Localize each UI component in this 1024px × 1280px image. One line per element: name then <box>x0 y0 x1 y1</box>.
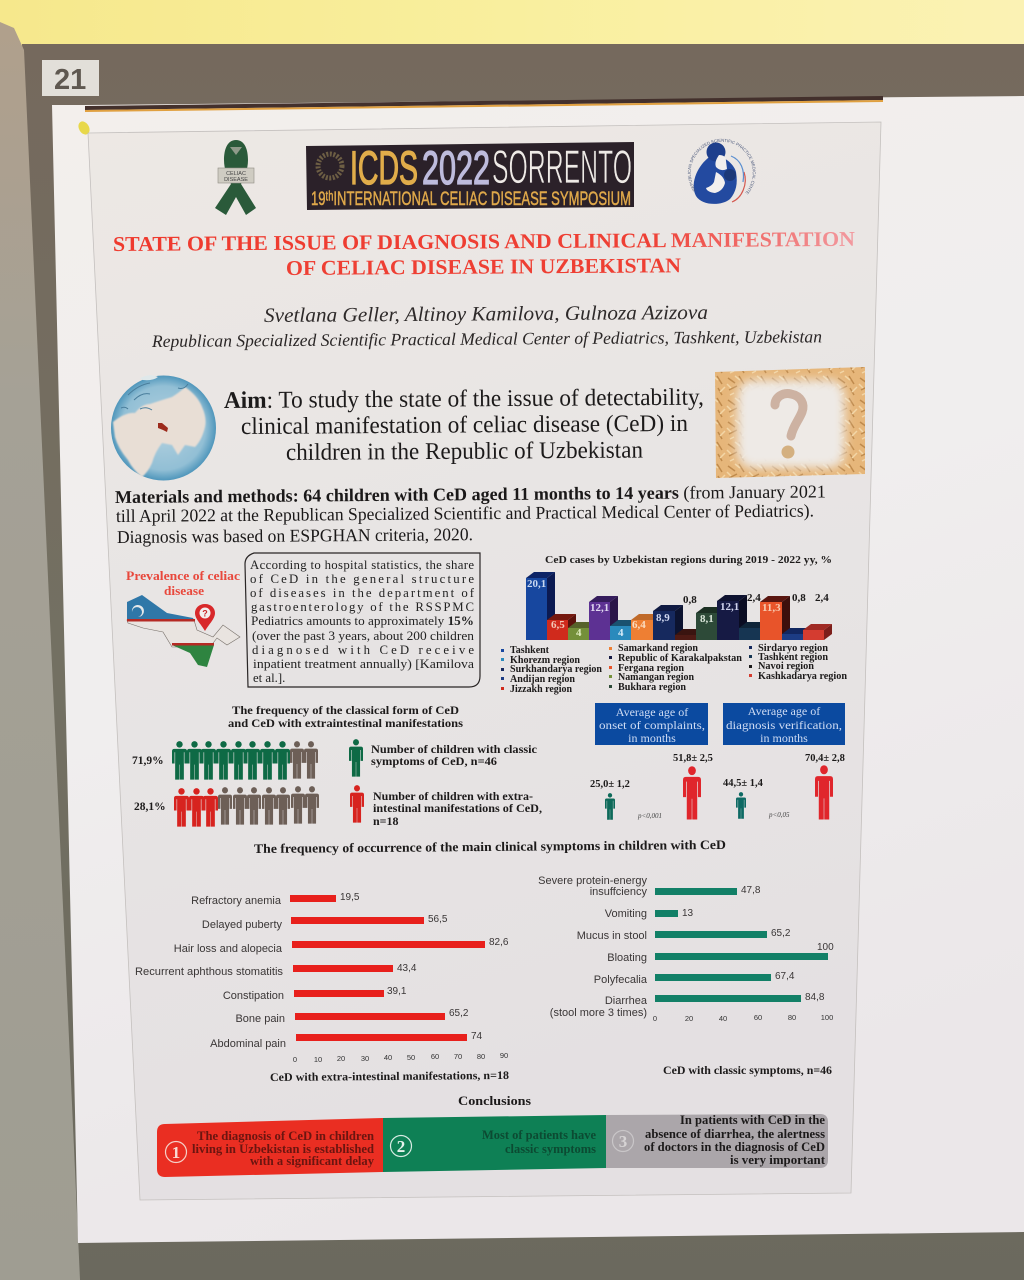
icon: celiac ribbon: DISEASE <box>224 177 248 183</box>
aim: clinical manifestation of celiac disease (CeD) in <box>241 411 688 440</box>
legend: extraintestinal: intestinal manifestations of CeD, <box>373 801 542 815</box>
bar chart: extra-intestinal manifestations: Refractory anemia <box>191 895 282 907</box>
bar value labels: 12,1 <box>590 602 609 614</box>
chart legend: regions: Surkhandarya region <box>510 664 602 675</box>
bar chart: classic symptoms: 100 <box>821 1013 833 1022</box>
pictogram: classic symptoms 71,9% <box>132 741 318 780</box>
legend: extraintestinal: Number of children with extra- <box>373 789 533 803</box>
heading: classical form frequency: The frequency of the classical form of CeD <box>232 705 459 717</box>
callout: hospital statistics: (over the past 3 years, about 200 children <box>252 629 475 643</box>
callout: hospital statistics: gastroenterology of the RSSPMC <box>251 600 474 614</box>
ICDS banner: ICDS <box>350 141 418 194</box>
bar value labels: 6,5 <box>551 619 565 631</box>
figures: verification age <box>723 753 845 819</box>
bar value labels: 4 <box>618 627 624 639</box>
bar chart: extra-intestinal manifestations: 20 <box>337 1054 345 1063</box>
poster number tag: 21 <box>54 64 86 96</box>
bar value labels: 11,3 <box>762 602 781 614</box>
chart legend: regions: Tashkent region <box>758 652 828 663</box>
materials and methods <box>115 481 826 547</box>
figures: onset age <box>590 753 713 820</box>
bar chart: extra-intestinal manifestations: Hair loss and alopecia <box>174 943 283 955</box>
conclusion 1 <box>157 1118 383 1177</box>
icon: celiac ribbon <box>215 140 256 215</box>
bar chart: classic symptoms: Vomiting <box>605 908 647 920</box>
bar chart: extra-intestinal manifestations: 39,1 <box>387 986 407 997</box>
left side panel <box>0 22 80 1280</box>
ICDS banner: SORRENTO <box>492 140 632 193</box>
callout: hospital statistics: inpatient treatment annually) [Kamilova <box>253 657 474 671</box>
poster number tag <box>42 60 99 96</box>
conclusion 3: absence of diarrhea, the alertness <box>645 1127 825 1141</box>
title: STATE OF THE ISSUE OF DIAGNOSIS AND CLINICAL MANIFESTATION <box>113 227 855 256</box>
bar chart: classic symptoms: Diarrhea <box>605 995 648 1007</box>
bar chart: extra-intestinal manifestations: 30 <box>361 1054 369 1063</box>
box: verification age <box>723 703 845 745</box>
conclusion 1: The diagnosis of CeD in children <box>197 1129 374 1143</box>
bar chart: classic symptoms: insuffciency <box>590 886 647 898</box>
chart legend: regions: Namangan region <box>618 672 694 683</box>
callout: hospital statistics <box>245 553 480 687</box>
conclusion 2: classic symptoms <box>505 1142 596 1156</box>
callout: hospital statistics: et al.]. <box>253 671 285 685</box>
figures: onset age: 25,0± 1,2 <box>590 779 630 790</box>
inner frame <box>88 122 881 1200</box>
icon: globe <box>111 375 216 480</box>
wreath icon <box>318 154 342 178</box>
ICDS banner: 19ᵗʰINTERNATIONAL CELIAC DISEASE SYMPOSIUM <box>311 188 631 210</box>
bar chart: classic symptoms: 0 <box>653 1014 657 1023</box>
bar chart: extra-intestinal manifestations: 60 <box>431 1052 439 1061</box>
bar chart: extra-intestinal manifestations: Constipation <box>223 990 284 1002</box>
bar chart: classic symptoms <box>538 875 834 1023</box>
pictogram: extraintestinal 28,1%: 28,1% <box>134 801 166 813</box>
bar chart: extra-intestinal manifestations: 43,4 <box>397 963 417 974</box>
chart legend: regions: Jizzakh region <box>510 684 572 695</box>
bar chart: extra-intestinal manifestations: 50 <box>407 1053 415 1062</box>
bar chart: classic symptoms: (stool more 3 times) <box>550 1007 647 1019</box>
legend: classic symptoms: Number of children with classic <box>371 742 538 756</box>
figures: onset age: 51,8± 2,5 <box>673 753 713 764</box>
chart legend: regions: Navoi region <box>758 661 814 672</box>
bar value labels: 12,1 <box>720 601 739 613</box>
figures: verification age: p<0,05 <box>768 811 790 819</box>
conclusion 1: with a significant delay <box>250 1154 375 1168</box>
materials and methods: Diagnosis was based on ESPGHAN criteria, 2020. <box>117 524 473 547</box>
chart legend: regions: Bukhara region <box>618 682 686 693</box>
bar chart: classic symptoms: 100 <box>817 942 834 953</box>
chart legend: regions: Andijan region <box>510 674 575 685</box>
icon: medical center logo <box>688 138 756 204</box>
affiliation: Republican Specialized Scientific Practical Medical Center of Pediatrics, Tashkent, Uzbekistan <box>151 326 822 351</box>
conclusion 3: In patients with CeD in the <box>680 1113 825 1127</box>
icon: medical center logo: REPUBLICAN SPECIALIZED SCIENTIFIC PRACTICE MEDICAL CENTER OF PEDIATRICS <box>688 138 756 194</box>
bar value labels <box>527 578 829 639</box>
authors: Svetlana Geller, Altinoy Kamilova, Gulnoza Azizova <box>264 302 708 327</box>
bar chart: classic symptoms: Bloating <box>607 952 647 964</box>
bar chart: extra-intestinal manifestations: 56,5 <box>428 914 448 925</box>
conclusion 3 <box>606 1113 828 1168</box>
ICDS banner: 2022 <box>422 141 490 194</box>
3D bar chart: regions <box>526 572 832 640</box>
box: verification age: Average age of <box>748 704 820 718</box>
legend: classic symptoms <box>349 739 538 777</box>
chart caption: extra-intestinal: CeD with extra-intestinal manifestations, n=18 <box>270 1070 509 1084</box>
bar chart: extra-intestinal manifestations: 82,6 <box>489 937 509 948</box>
box: verification age: diagnosis verification, <box>726 718 842 732</box>
chart legend: regions: Samarkand region <box>618 643 698 654</box>
box: onset age: in months <box>628 731 676 745</box>
prevalence heading <box>126 568 240 598</box>
bar chart: extra-intestinal manifestations: 40 <box>384 1053 392 1062</box>
aim: Aim: To study the state of the issue of detectability, <box>224 385 704 414</box>
Uzbekistan marker <box>158 423 168 432</box>
conclusion 3: 3 <box>619 1132 627 1151</box>
heading: classical form frequency <box>228 705 464 730</box>
legend: extraintestinal <box>350 785 542 828</box>
bar chart: extra-intestinal manifestations: 80 <box>477 1052 485 1061</box>
legend: extraintestinal: n=18 <box>373 814 399 828</box>
photo: question mark of grains <box>715 367 865 478</box>
bar chart: extra-intestinal manifestations: 19,5 <box>340 892 360 903</box>
bar chart: extra-intestinal manifestations: 0 <box>293 1055 297 1064</box>
heading: classical form frequency: and CeD with extraintestinal manifestations <box>228 718 464 730</box>
bar value labels: 2,4 <box>747 592 761 604</box>
box: onset age: onset of complaints, <box>599 718 705 732</box>
chart legend: regions: Republic of Karakalpakstan <box>618 653 742 664</box>
bar value labels: 0,8 <box>792 592 806 604</box>
ICDS banner <box>306 140 634 210</box>
bar chart: classic symptoms: 60 <box>754 1013 762 1022</box>
callout: hospital statistics: of diseases in the department of <box>250 586 475 600</box>
conclusion 3: of doctors in the diagnosis of CeD <box>644 1140 825 1154</box>
icon: Uzbekistan map with pin <box>127 595 240 667</box>
bar chart: classic symptoms: Polyfecalia <box>594 974 648 986</box>
pictogram: classic symptoms 71,9%: 71,9% <box>132 755 164 767</box>
chart caption: classic symptoms: CeD with classic symptoms, n=46 <box>663 1065 832 1077</box>
bar chart: extra-intestinal manifestations: 74 <box>471 1031 483 1042</box>
bar chart: classic symptoms: 13 <box>682 908 694 919</box>
chart legend: regions <box>501 643 847 695</box>
bar chart: classic symptoms: 40 <box>719 1014 727 1023</box>
title <box>113 227 855 280</box>
bar chart: extra-intestinal manifestations: 10 <box>314 1055 322 1064</box>
title: OF CELIAC DISEASE IN UZBEKISTAN <box>286 253 681 280</box>
icon: Uzbekistan map with pin: ? <box>202 608 208 618</box>
pictogram: extraintestinal 28,1% <box>134 786 319 827</box>
bar chart: extra-intestinal manifestations: Delayed puberty <box>202 919 282 931</box>
callout: hospital statistics: Pediatrics amounts to approximately 15% <box>251 614 474 628</box>
bar value labels: 20,1 <box>527 578 546 590</box>
prevalence heading: Prevalence of celiac <box>126 568 240 583</box>
chart legend: regions: Khorezm region <box>510 655 580 666</box>
chart legend: regions: Fergana region <box>618 663 684 674</box>
bar chart: extra-intestinal manifestations: Recurrent aphthous stomatitis <box>135 966 283 978</box>
box: onset age <box>595 703 708 745</box>
bar chart: extra-intestinal manifestations: Bone pain <box>235 1013 285 1025</box>
icon: celiac ribbon: CELIAC <box>226 171 246 177</box>
conclusion 2: Most of patients have <box>482 1128 596 1142</box>
conclusion 1: 1 <box>172 1143 180 1162</box>
bar chart: extra-intestinal manifestations <box>135 892 509 1064</box>
bar chart: classic symptoms: 20 <box>685 1014 693 1023</box>
materials and methods: till April 2022 at the Republican Specialized Scientific and Practical Medical Center of Pediatrics). <box>116 501 814 527</box>
conclusion 1: living in Uzbekistan is established <box>192 1142 374 1156</box>
conclusion 2: 2 <box>397 1137 405 1156</box>
yellow pin <box>76 119 92 137</box>
bar value labels: 8,9 <box>656 612 670 624</box>
aim <box>224 385 704 466</box>
figures: verification age: 44,5± 1,4 <box>723 778 764 789</box>
bar chart: classic symptoms: Severe protein-energy <box>538 875 647 887</box>
callout: hospital statistics: According to hospital statistics, the share <box>250 558 474 572</box>
figures: onset age: p<0,001 <box>637 812 662 820</box>
bar chart: classic symptoms: 84,8 <box>805 992 825 1003</box>
chart legend: regions: Sirdaryo region <box>758 643 828 654</box>
conclusion 3: is very important <box>730 1153 826 1167</box>
bar value labels: 0,8 <box>683 594 697 606</box>
chart legend: regions: Kashkadarya region <box>758 671 847 682</box>
materials and methods: Materials and methods: 64 children with CeD aged 11 months to 14 years (from January 2021 <box>115 481 826 508</box>
chart title: CeD cases by region: CeD cases by Uzbekistan regions during 2019 - 2022 yy, % <box>545 554 832 566</box>
heading: clinical symptoms: The frequency of occurrence of the main clinical symptoms in children with CeD <box>254 837 726 856</box>
bar chart: extra-intestinal manifestations: 65,2 <box>449 1008 469 1019</box>
bar value labels: 4 <box>576 627 582 639</box>
bar chart: classic symptoms: 65,2 <box>771 928 791 939</box>
bar chart: classic symptoms: 47,8 <box>741 885 761 896</box>
bar chart: classic symptoms: 80 <box>788 1013 796 1022</box>
bar chart: extra-intestinal manifestations: 90 <box>500 1051 508 1060</box>
figures: verification age: 70,4± 2,8 <box>805 753 845 764</box>
callout: hospital statistics: diagnosed with CeD receive <box>252 643 474 657</box>
bar value labels: 8,1 <box>700 613 714 625</box>
poster top stripe <box>85 96 883 112</box>
box: verification age: in months <box>760 731 808 745</box>
prevalence heading: disease <box>164 583 204 598</box>
chart legend: regions: Tashkent <box>510 645 549 656</box>
aim: children in the Republic of Uzbekistan <box>286 438 643 466</box>
background wall <box>0 0 1024 50</box>
bar chart: extra-intestinal manifestations: Abdominal pain <box>210 1038 286 1050</box>
bar chart: extra-intestinal manifestations: 70 <box>454 1052 462 1061</box>
heading: conclusions: Conclusions <box>458 1093 531 1108</box>
bar value labels: 6,4 <box>632 619 646 631</box>
callout: hospital statistics: of CeD in the general structure <box>250 572 474 586</box>
bar chart: classic symptoms: Mucus in stool <box>577 930 647 942</box>
legend: classic symptoms: symptoms of CeD, n=46 <box>371 754 497 768</box>
conclusion 2 <box>383 1115 606 1172</box>
bar value labels: 2,4 <box>815 592 829 604</box>
box: onset age: Average age of <box>616 705 688 719</box>
bar chart: classic symptoms: 67,4 <box>775 971 795 982</box>
map pin <box>195 604 215 631</box>
